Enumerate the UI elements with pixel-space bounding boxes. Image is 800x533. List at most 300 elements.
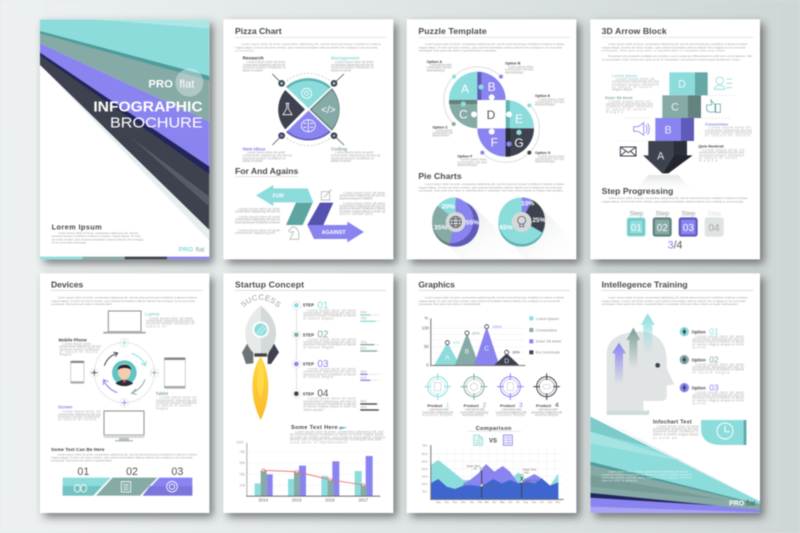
- puzzle option labels: eiusmod tempor: [535, 160, 556, 164]
- step 04: et dolore magna aliqua ut enim ad: [303, 405, 356, 409]
- arrow text left: consectetur adipiscing elit sed do: [235, 210, 280, 214]
- label: new ideas: New Ideas: [243, 146, 266, 151]
- intro text: Lorem ipsum dolor sit amet, consectetur adipiscing elit, sed do eiusmod tempor incididunt ut labore et dolore: [608, 296, 748, 300]
- comparison area chart: Dec: [461, 500, 466, 504]
- puzzle diagram: C: [459, 107, 468, 121]
- comparison area chart: 20.0: [422, 467, 428, 471]
- intro text: magna aliqua. Ut enim ad minim veniam, quis nostrud exercitation ullamco laboris nisi ut aliquip ex ea commodo: [51, 299, 195, 303]
- puzzle diagram: G: [514, 136, 524, 150]
- step 02: 85%: [360, 346, 367, 350]
- intro text: [602, 296, 748, 306]
- intro text: magna aliqua. Ut enim ad minim veniam, quis nostrud exercitation ullamco laboris nisi ut aliquip ex ea commodo: [235, 45, 378, 49]
- label: research: Research: [243, 56, 264, 61]
- icon: binoculars: [74, 485, 87, 492]
- device labels: ut labore et dolore: [58, 418, 97, 422]
- chart text: Ut enim ad minim veniam, quis nostrud exercitation ullamco: [290, 435, 385, 439]
- step 01: 50%: [360, 311, 367, 315]
- comparison area chart: 5.0: [423, 489, 427, 493]
- bar and line chart: 75$: [239, 450, 245, 454]
- step boxes: 01: [631, 223, 642, 234]
- puzzle option labels: Option B: [505, 62, 521, 66]
- cover heading and text: Lorem ipsum dolor sit amet, consectetur adipiscing elit, sed do: [58, 231, 139, 235]
- icon: flask: [283, 103, 292, 115]
- heading: pizza chart: Pizza Chart: [235, 26, 282, 36]
- intro text: ut perspiciatis unde omnis iste natus error sit voluptatem accusantium doloremque laudantium totam: [602, 57, 740, 61]
- label: management: [331, 56, 374, 72]
- stripe text: [602, 469, 692, 483]
- step 01: et dolore magna: [303, 316, 334, 320]
- label: coding: eiusmod tempor incididunt ut: [331, 156, 374, 160]
- icon: brain: [301, 120, 315, 132]
- comparison area chart: Mar: [484, 500, 489, 504]
- option 01: et dolore magna aliqua ut enim: [692, 342, 744, 346]
- triangle chart: D: [504, 358, 509, 365]
- option 02: Option: [692, 358, 706, 363]
- label: coding: labore et dolore: [331, 159, 351, 163]
- puzzle option labels: eiusmod tempor: [457, 163, 478, 167]
- option 03: et dolore magna aliqua ut enim: [692, 398, 744, 402]
- arrow text left: [235, 207, 280, 235]
- bar and line chart: 2014: [259, 497, 269, 502]
- intro text: consequat. Duis aute irure dolor in reprehenderit.: [51, 302, 113, 306]
- label: research: labore et dolore: [243, 68, 263, 72]
- heading: graphics: Graphics: [418, 280, 455, 290]
- puzzle diagram: D: [487, 108, 496, 122]
- arrow text right: eiusmod tempor incididunt: [339, 196, 373, 200]
- small logo: [179, 247, 205, 254]
- label: coding: Coding: [331, 146, 347, 151]
- chart legend: Ea Commodo: [536, 350, 561, 355]
- device labels: Laptop: [145, 312, 160, 317]
- chart text: do eiusmod tempor incididunt ut labore et dolore magna aliqua: [290, 433, 384, 437]
- for against arrows: AGAINST: [322, 230, 346, 236]
- option 01: minim: [692, 345, 706, 349]
- label: management: labore et dolore: [331, 68, 351, 72]
- heading: some text here: Some Text Here: [291, 425, 338, 431]
- stripe logo: PRO: [729, 501, 745, 508]
- triangle chart: 20%: [512, 350, 520, 354]
- step 04: consectetur adipiscing elit sed do: [303, 399, 356, 403]
- step 02: STEP: [303, 332, 314, 337]
- step timeline: [292, 301, 301, 398]
- block labels: eiusmod tempor incididunt: [612, 82, 659, 86]
- icon: pencil: [321, 189, 332, 200]
- product labels: Product: [464, 403, 479, 408]
- triangle chart: 50%: [453, 341, 461, 345]
- triangle chart: C: [484, 345, 489, 352]
- puzzle diagram: E: [515, 112, 523, 126]
- puzzle diagram: [444, 67, 539, 162]
- step 01: eiusmod tempor incididunt ut labore: [303, 314, 356, 318]
- arrow text right: consectetur adipiscing elit sed do: [339, 204, 386, 208]
- step boxes: 02: [657, 223, 668, 234]
- intro text: Lorem ipsum dolor sit amet, consectetur adipiscing elit, sed do eiusmod tempor incididunt ut labore et dolore: [425, 296, 565, 300]
- icon: document: [121, 482, 131, 492]
- comparison area chart: Jun: [508, 500, 513, 504]
- label: research: consectetur adipiscing elit sed do: [243, 63, 286, 67]
- cover heading and text: ad minim veniam, quis nostrud exercitation ullamco laboris nisi ut aliquip: [52, 237, 144, 241]
- arrow text right: et dolore magna aliqua ut enim ad: [339, 209, 386, 213]
- option 01: eiusmod tempor incididunt ut labore: [692, 340, 744, 344]
- intro text: magna aliqua. Ut enim ad minim veniam, quis nostrud exercitation ullamco laboris nisi ut aliquip ex ea commodo: [418, 299, 560, 303]
- numbered ribbon: 02: [126, 466, 138, 478]
- panel: cover page: [40, 19, 209, 259]
- brand logo: PRO: [148, 78, 173, 90]
- intro text: consequat. Duis aute irure dolor in reprehenderit in voluptate velit esse cillum dolore eu fugiat nulla pariatur.: [602, 302, 738, 306]
- step counter: 3/4: [668, 240, 683, 252]
- icon: people: [714, 77, 732, 89]
- block labels: ut labore et dolore: [699, 156, 738, 160]
- infochart text: Infochart Text: [653, 420, 692, 426]
- stacked 3d arrow blocks: A: [657, 150, 665, 162]
- option 03: eiusmod tempor incididunt ut labore: [692, 396, 744, 400]
- cover title: BROCHURE: [110, 116, 203, 132]
- cover heading and text: eiusmod tempor incididunt ut labore et dolore magna aliqua. Ut enim: [52, 234, 141, 238]
- product labels: eiusmod tempor: [497, 413, 526, 417]
- icon: bulb: [518, 216, 526, 227]
- infochart text: ut enim ad: [653, 436, 677, 440]
- step boxes: Step: [681, 211, 695, 218]
- device labels: consectetur adipiscing elit sed do: [146, 319, 195, 323]
- pie chart 1: 20%: [442, 204, 455, 211]
- product labels: eiusmod tempor: [422, 413, 453, 417]
- label: new ideas: consectetur adipiscing elit sed do: [243, 154, 292, 158]
- pizza chart: [272, 73, 344, 146]
- bar and line chart: 50$: [239, 461, 245, 465]
- device labels: consectetur adipiscing elit sed: [59, 345, 101, 349]
- brand logo: [148, 69, 203, 97]
- numbered ribbon: 01: [77, 466, 89, 478]
- product targets: [424, 373, 560, 400]
- head with arrows: [607, 313, 674, 415]
- arrow text right: Lorem ipsum dolor sit amet: [343, 191, 385, 195]
- icon: gear: [302, 88, 312, 98]
- device labels: eiusmod tempor incididunt: [58, 415, 100, 419]
- intro text: magna aliqua. Ut enim ad minim veniam, quis nostrud exercitation ullamco laboris nisi ut aliquip ex ea commodo: [602, 299, 746, 303]
- option 03: Lorem ipsum dolor sit amet: [696, 390, 744, 394]
- brand logo: flat: [179, 78, 195, 90]
- stacked 3d arrow blocks: D: [678, 79, 686, 91]
- arrow text right: [339, 191, 386, 216]
- product labels: 3: [519, 402, 523, 409]
- option 03: 03: [709, 382, 719, 392]
- panel: pizza chart page: [223, 19, 393, 259]
- comparison area chart: 10.0: [422, 482, 428, 486]
- comparison area chart: 102: [524, 470, 529, 474]
- step 03: [303, 359, 380, 381]
- infochart text: [653, 420, 699, 440]
- chart text: laboris nisi ut aliquip ex ea commodo consequat duis aute: [290, 438, 382, 442]
- cover title: INFOGRAPHIC: [93, 100, 203, 116]
- infochart text: consectetur adipiscing elit sed: [653, 427, 699, 431]
- icon: badge: [167, 481, 177, 492]
- puzzle option labels: Lorem ipsum dolor: [538, 154, 565, 158]
- step boxes: Step: [707, 211, 721, 218]
- icon: avatar: [112, 360, 137, 386]
- comparison area chart: Jan: [470, 500, 474, 504]
- label: management: Management: [331, 56, 360, 61]
- stripe logo: [729, 501, 755, 508]
- arrow text left: Lorem ipsum dolor sit amet: [238, 215, 280, 219]
- intro text: [418, 296, 565, 306]
- steps text: Lorem ipsum dolor sit amet, consectetur adipiscing elit, sed do eiusmod tempor incididunt ut labore et dolore: [608, 196, 748, 200]
- device labels: ut labore et dolore: [156, 404, 191, 408]
- step 03: Lorem ipsum dolor sit amet: [307, 367, 356, 371]
- pie chart 2: [498, 197, 570, 259]
- bar and line chart: 2016: [325, 497, 335, 502]
- device labels: consectetur adipiscing elit sed: [58, 412, 101, 416]
- device: phone: [71, 361, 84, 383]
- bar and line chart: 100$: [236, 441, 243, 445]
- block labels: ut labore et dolore: [612, 85, 652, 89]
- lower text: magna aliqua. Ut enim ad minim veniam, quis nostrud exercitation ullamco laboris nisi ut aliquip ex ea commodo: [51, 456, 193, 460]
- for against arrows: [256, 185, 364, 242]
- intro text: [235, 42, 381, 52]
- comparison area chart: 25.0: [422, 460, 428, 464]
- heading: startup concept: Startup Concept: [235, 280, 304, 290]
- step 03: consectetur adipiscing elit sed do: [303, 370, 356, 374]
- label: management: consectetur adipiscing elit sed do: [331, 63, 374, 67]
- chart text: [290, 430, 385, 444]
- icon: envelope: [620, 147, 636, 156]
- comparison area chart: 89: [485, 486, 489, 490]
- intro text: consequat. Duis aute irure dolor in reprehenderit in voluptate.: [418, 48, 497, 52]
- intro text: [418, 42, 565, 52]
- numbered ribbon: 03: [171, 466, 183, 478]
- puzzle option labels: Lorem ipsum dolor: [538, 97, 565, 101]
- option 02: [680, 355, 744, 374]
- bar and line chart: 2015: [292, 497, 302, 502]
- device: screen: [104, 411, 144, 441]
- product labels: consectetur adipiscing elit: [531, 410, 562, 414]
- puzzle diagram: B: [488, 80, 496, 94]
- device labels: eiusmod tempor incididunt: [156, 401, 197, 405]
- device: tablet: [164, 358, 185, 388]
- icon: knight: [289, 227, 299, 239]
- device labels: Lorem ipsum dolor: [63, 342, 92, 346]
- step 02: 02: [317, 330, 329, 341]
- chart legend: Lorem Ipsum: [536, 316, 560, 321]
- intro text: magna aliqua. Ut enim ad minim veniam, quis nostrud exercitation ullamco laboris nisi ut aliquip ex ea commodo: [418, 45, 563, 49]
- arrow text left: Lorem ipsum dolor sit amet: [238, 207, 280, 211]
- panel: graphics page: [407, 273, 576, 513]
- device labels: Mobile Phone: [59, 338, 87, 343]
- heading: for and agains: For And Agains: [235, 166, 299, 176]
- icon: code: </>: [321, 105, 336, 116]
- heading: devices: Devices: [51, 280, 84, 290]
- central hub: [90, 338, 159, 407]
- puzzle option labels: eiusmod tem: [432, 134, 449, 138]
- stripe text: enim ad minim veniam quis nostrud exercitation ullamco: [602, 475, 692, 479]
- block labels: Quis Nostrud: [698, 144, 724, 149]
- puzzle option labels: eiusmod tempor: [505, 70, 524, 74]
- cover title: [93, 100, 203, 132]
- comparison area chart: Oct: [445, 500, 449, 504]
- puzzle option labels: Option G: [535, 151, 551, 155]
- product labels: Lorem ipsum dolor: [429, 408, 450, 412]
- infochart text: Lorem ipsum dolor sit amet: [657, 424, 699, 428]
- puzzle option labels: Option F: [457, 155, 473, 159]
- option 02: 02: [709, 355, 719, 365]
- intro text: Lorem ipsum dolor sit amet, consectetur adipiscing elit, sed do eiusmod tempor incididunt ut labore et dolore: [425, 42, 565, 46]
- pie chart 1: 35%: [434, 225, 447, 232]
- puzzle option labels: consectetur elit: [432, 131, 452, 135]
- step 03: et dolore magna: [303, 375, 334, 379]
- diagonal stripes: [40, 19, 209, 241]
- cover heading and text: ex ea commodo consequat.: [52, 241, 87, 245]
- block labels: [605, 73, 752, 163]
- bar and line chart: [236, 441, 380, 502]
- block labels: magna: [699, 159, 718, 163]
- pie chart 2: 10%: [521, 201, 534, 208]
- puzzle option labels: [427, 60, 565, 167]
- stripe text: laboris nisi ut aliquip: [602, 479, 637, 483]
- block labels: Consectetur: [705, 121, 729, 126]
- stripe text: eiusmod tempor incididunt ut labore et dolore magna aliqua ut: [602, 472, 692, 476]
- option 01: consectetur adipiscing elit sed do: [692, 337, 744, 341]
- stacked 3d arrow blocks: [618, 72, 738, 193]
- label: new ideas: labore et dolore: [243, 159, 263, 163]
- pie chart 1: [432, 197, 508, 259]
- comparison area chart: Jul: [516, 500, 520, 504]
- step 04: 04: [317, 389, 329, 400]
- intro text: consequat. Duis aute irure dolor in reprehenderit.: [418, 302, 481, 306]
- product labels: Lorem ipsum dolor: [538, 408, 559, 412]
- label: coding: consectetur adipiscing elit sed do: [331, 154, 381, 158]
- triangle chart: 50: [424, 344, 429, 349]
- device labels: Screen: [58, 405, 73, 410]
- option 01: Option: [692, 329, 706, 334]
- device labels: Lorem ipsum dolor sit: [62, 410, 100, 414]
- steps text: [602, 196, 748, 203]
- block labels: Lorem ipsum dolor sit: [702, 148, 744, 152]
- option 01: [680, 327, 744, 349]
- block labels: consectetur adipiscing elit sed: [612, 80, 659, 84]
- small logo: flat: [196, 247, 205, 254]
- option 02: Lorem ipsum dolor sit amet: [696, 362, 744, 366]
- icon: globe: [450, 216, 461, 228]
- step 04: eiusmod tempor incididunt ut labore: [303, 402, 356, 406]
- label: coding: [331, 146, 381, 163]
- step boxes: Step: [629, 211, 643, 218]
- label: new ideas: eiusmod tempor incididunt ut: [243, 156, 285, 160]
- bottom stripes: [590, 413, 760, 513]
- label: research: eiusmod tempor incididunt ut: [243, 66, 285, 70]
- step 03: 03: [317, 359, 329, 370]
- block labels: Lorem Ipsum: [612, 73, 637, 78]
- step boxes: [627, 211, 724, 237]
- comparison area chart: Dolor Text: [485, 483, 499, 487]
- comparison area chart: Dolor Text: [525, 479, 539, 483]
- product labels: Lorem ipsum dolor: [465, 408, 486, 412]
- device labels: Lorem ipsum dolor sit amet: [149, 316, 192, 320]
- option 01: Lorem ipsum dolor sit amet: [696, 334, 744, 338]
- panel: intellegence training page: [590, 273, 760, 513]
- step 01: [303, 300, 380, 322]
- label: research: [243, 56, 286, 72]
- intro text: [602, 42, 753, 61]
- puzzle option labels: eiusmod tempor: [535, 103, 556, 107]
- panel: startup concept page: [221, 271, 404, 524]
- option 02: eiusmod tempor incididunt ut labore: [692, 368, 744, 372]
- product labels: eiusmod tempor: [462, 413, 485, 417]
- step 02: et dolore magna: [303, 345, 334, 349]
- comparison area chart: Sep: [436, 500, 441, 504]
- chart legend: Consectetur: [536, 327, 558, 332]
- panel: devices page: [40, 273, 209, 513]
- step 04: minim veniam: [303, 408, 324, 412]
- puzzle option labels: consectetur elit sed: [427, 66, 452, 70]
- intro text: [51, 296, 197, 306]
- intro text: magna aliqua. Ut enim ad minim veniam, quis nostrud exercitation ullamco laboris nisi ut aliquip ex ea commodo: [602, 45, 746, 49]
- comparison area chart: Nov: [548, 500, 553, 504]
- block labels: magna aliqua: [612, 88, 632, 92]
- pie text: magna aliqua. Ut enim ad minim veniam, quis nostrud exercitation ullamco laboris nisi ut aliquip ex ea commodo: [418, 185, 563, 189]
- device labels: [58, 312, 197, 422]
- arrow text left: consectetur adipiscing elit: [235, 231, 275, 235]
- pie text: [418, 182, 565, 192]
- arrow text right: eiusmod tempor incididunt ut labore: [339, 207, 386, 211]
- block labels: eiusmod tempor incididunt: [699, 153, 744, 157]
- triangle chart: 100: [422, 325, 429, 330]
- comparison area chart: Oct: [540, 500, 544, 504]
- product labels: consectetur adipiscing elit: [422, 410, 453, 414]
- label: management: Lorem ipsum dolor sit amet: [335, 60, 373, 64]
- step 02: 70%: [360, 340, 367, 344]
- comparison area chart: Dolor Text: [523, 467, 537, 471]
- device labels: Tablet: [156, 391, 169, 396]
- puzzle option labels: Lorem ipsum: [436, 128, 453, 132]
- arrow text left: consectetur adipiscing elit sed do: [235, 218, 280, 222]
- label: new ideas: [243, 146, 292, 163]
- step 01: 75%: [360, 317, 367, 321]
- heading: some text can be here: Some Text Can Be Here: [51, 447, 105, 452]
- step boxes: 04: [708, 223, 720, 234]
- option 02: consectetur adipiscing elit sed do: [692, 365, 744, 369]
- step 03: 35%: [360, 370, 367, 374]
- device labels: magna: [156, 406, 168, 410]
- block labels: Dolor Sit Amet: [605, 95, 633, 100]
- block labels: eiusmod tempor incididunt: [606, 105, 653, 109]
- comparison area chart: Nov: [453, 500, 458, 504]
- comparison area chart: 30.0: [422, 452, 428, 456]
- puzzle diagram: F: [491, 136, 498, 150]
- block labels: Lorem ipsum dolor sit: [616, 77, 654, 81]
- comparison area chart: 23: [526, 483, 529, 487]
- heading: pie charts: Pie Charts: [418, 171, 462, 181]
- step 01: 01: [317, 300, 329, 311]
- heading: comparison: [467, 426, 521, 432]
- step 04: Lorem ipsum dolor sit amet: [307, 397, 356, 401]
- for against arrows: FOR: [273, 193, 284, 199]
- rocket: [240, 294, 281, 420]
- colour bar: [40, 257, 209, 259]
- step 02: [303, 330, 380, 352]
- comparison area chart: 5%: [423, 444, 427, 448]
- triangle chart: [422, 316, 525, 367]
- option 03: minim: [692, 402, 706, 406]
- stacked 3d arrow blocks: B: [664, 124, 672, 136]
- product labels: consectetur adipiscing elit: [496, 410, 526, 414]
- small logo: PRO: [179, 247, 193, 254]
- step 02: Lorem ipsum dolor sit amet: [307, 337, 356, 341]
- infochart text: eiusmod tempor incididunt ut: [653, 430, 698, 434]
- puzzle option labels: Lorem ipsum dolor: [430, 63, 453, 67]
- vs icons: [474, 435, 512, 445]
- comparison area chart: 23: [473, 467, 477, 471]
- product labels: 1: [446, 402, 450, 409]
- heading: comparison: Comparison: [476, 426, 512, 432]
